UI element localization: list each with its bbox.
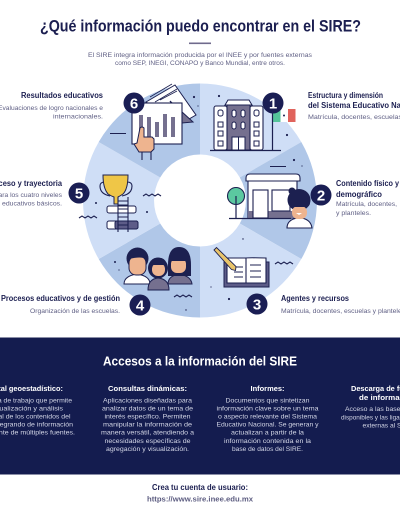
column: informes: Educativo Nacional. Se generan y (216, 422, 319, 428)
label 6: resultados: Evaluaciones de logro nacionales e (0, 105, 103, 112)
column: consultas: manera versátil, atendiendo a (101, 430, 194, 436)
column: informes: información contenida en la (224, 438, 311, 445)
label 2: contenido (336, 179, 400, 217)
label 4: procesos (1, 294, 120, 315)
number badge 1 (262, 92, 284, 114)
label 3: agentes: Matrícula, docentes, escuelas y planteles. (281, 308, 400, 315)
column: informes: base de datos del SIRE. (232, 446, 303, 453)
column: consultas: necesidades específicas de (104, 438, 191, 445)
icon: open book and pencil (214, 248, 269, 287)
decorative accents (79, 95, 303, 311)
label 5: acceso (0, 179, 63, 208)
donut chart (83, 84, 317, 318)
column: informes (216, 384, 319, 453)
icon: three people (124, 247, 192, 290)
intro text: como SEP, INEGI, CONAPO y Banco Mundial, entre otros. (115, 60, 285, 67)
number badge 3: 3 (253, 296, 261, 314)
number badge 5 (68, 182, 90, 204)
label 1: estructura (308, 91, 400, 121)
number badge 1: 1 (269, 96, 277, 112)
call to action (147, 483, 254, 504)
label 6: resultados: Resultados educativos (21, 91, 104, 100)
label 5: acceso: educativos básicos. (2, 200, 62, 208)
number badge 2 (310, 184, 332, 206)
label 6: resultados: internacionales. (53, 114, 103, 120)
column: consultas: Consultas dinámicas: (108, 384, 187, 393)
label 3: agentes: Agentes y recursos (281, 294, 350, 303)
column: informes: Informes: (250, 384, 284, 393)
column: consultas: interés específico. Permiten (104, 414, 191, 420)
intro text (88, 52, 313, 67)
panel: accesos (0, 338, 400, 474)
icon: building with flag (210, 100, 296, 150)
column: consultas: manipular la información de (103, 422, 192, 428)
column: consultas: agregación y visualización. (106, 446, 189, 453)
icon: trophy and books (100, 175, 138, 232)
label 2: contenido: Matrícula, docentes, (336, 201, 397, 208)
label 4: procesos: Procesos educativos y de gestión (1, 294, 120, 303)
number badge 4: 4 (136, 298, 145, 314)
label 3: agentes (281, 294, 400, 315)
column: consultas: analizar datos de un tema de (102, 406, 193, 412)
number badge 6: 6 (130, 96, 138, 112)
number badge 3 (246, 294, 268, 314)
column: consultas (101, 384, 194, 453)
label 4: procesos: Organización de las escuelas. (30, 308, 120, 315)
column: descarga (341, 384, 400, 430)
number badge 6 (124, 92, 144, 114)
column: consultas: Aplicaciones diseñadas para (103, 397, 192, 404)
icon: school, tree and girl (228, 174, 312, 228)
label 2: contenido: y planteles. (336, 210, 371, 217)
panel heading: Accesos a la información del SIRE (103, 354, 297, 368)
number badge 5: 5 (75, 186, 83, 202)
column: informes: Documentos que sintetizan (226, 397, 310, 404)
call to action: https://www.sire.inee.edu.mx (147, 494, 254, 504)
label 2: contenido: demográfico (336, 190, 382, 199)
title underline (189, 42, 211, 44)
column: informes: o aspecto relevante del Sistema (218, 414, 317, 420)
label 6: resultados (0, 91, 104, 120)
call to action: Crea tu cuenta de usuario: (152, 483, 248, 492)
number badge 2: 2 (317, 188, 325, 204)
label 1: estructura: Estructura y dimensión (308, 91, 383, 100)
column: informes: información clave sobre un tema (216, 406, 319, 412)
intro text: El SIRE integra información producida por el INEE y por fuentes externas (88, 52, 313, 59)
icon: chart, documents and hand (132, 84, 196, 160)
number badge 4 (130, 294, 150, 316)
column: informes: actualizan a partir de la (231, 430, 304, 436)
column: portal geoestadístico (0, 384, 75, 436)
